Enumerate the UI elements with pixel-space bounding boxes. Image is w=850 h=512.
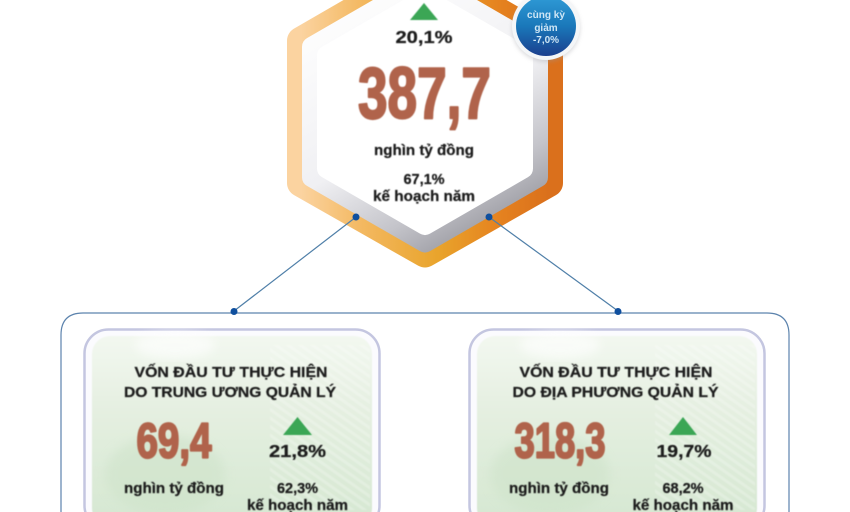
main figures xyxy=(358,3,491,205)
panel: outer frame xyxy=(61,308,789,512)
icon: up triangle xyxy=(669,417,697,435)
plan share: 62,3% xyxy=(277,481,318,497)
unit: nghìn tỷ đồng xyxy=(374,143,474,159)
main value: 387,7 xyxy=(358,54,491,134)
unit: nghìn tỷ đồng xyxy=(124,481,224,497)
card heading: DO TRUNG ƯƠNG QUẢN LÝ xyxy=(124,383,336,401)
value: 318,3 xyxy=(514,414,606,468)
badge: same period: giảm xyxy=(534,23,558,34)
card heading: DO ĐỊA PHƯƠNG QUẢN LÝ xyxy=(512,383,718,401)
panel: central government card xyxy=(84,330,380,512)
badge: same period xyxy=(512,0,580,62)
card heading: VỐN ĐẦU TƯ THỰC HIỆN xyxy=(134,363,328,381)
growth rate: 19,7% xyxy=(656,441,712,461)
card heading xyxy=(512,363,718,401)
hexagon: main figure xyxy=(301,0,549,254)
growth rate: 20,1% xyxy=(396,27,453,47)
growth rate: 21,8% xyxy=(269,441,326,461)
connector: left xyxy=(234,214,360,311)
panel: local government card xyxy=(470,330,764,512)
unit: nghìn tỷ đồng xyxy=(509,481,609,497)
plan share: 68,2% xyxy=(662,481,704,497)
badge: same period: -7,0% xyxy=(533,35,559,46)
card heading xyxy=(124,363,336,401)
badge: same period: cùng kỳ xyxy=(527,10,565,21)
plan label: kế hoạch năm xyxy=(373,189,475,205)
value: 69,4 xyxy=(136,414,212,468)
card heading: VỐN ĐẦU TƯ THỰC HIỆN xyxy=(520,363,712,381)
icon: up triangle xyxy=(283,417,312,435)
plan share: 67,1% xyxy=(403,172,445,188)
connector: right xyxy=(486,214,618,311)
icon: up triangle xyxy=(410,3,438,20)
